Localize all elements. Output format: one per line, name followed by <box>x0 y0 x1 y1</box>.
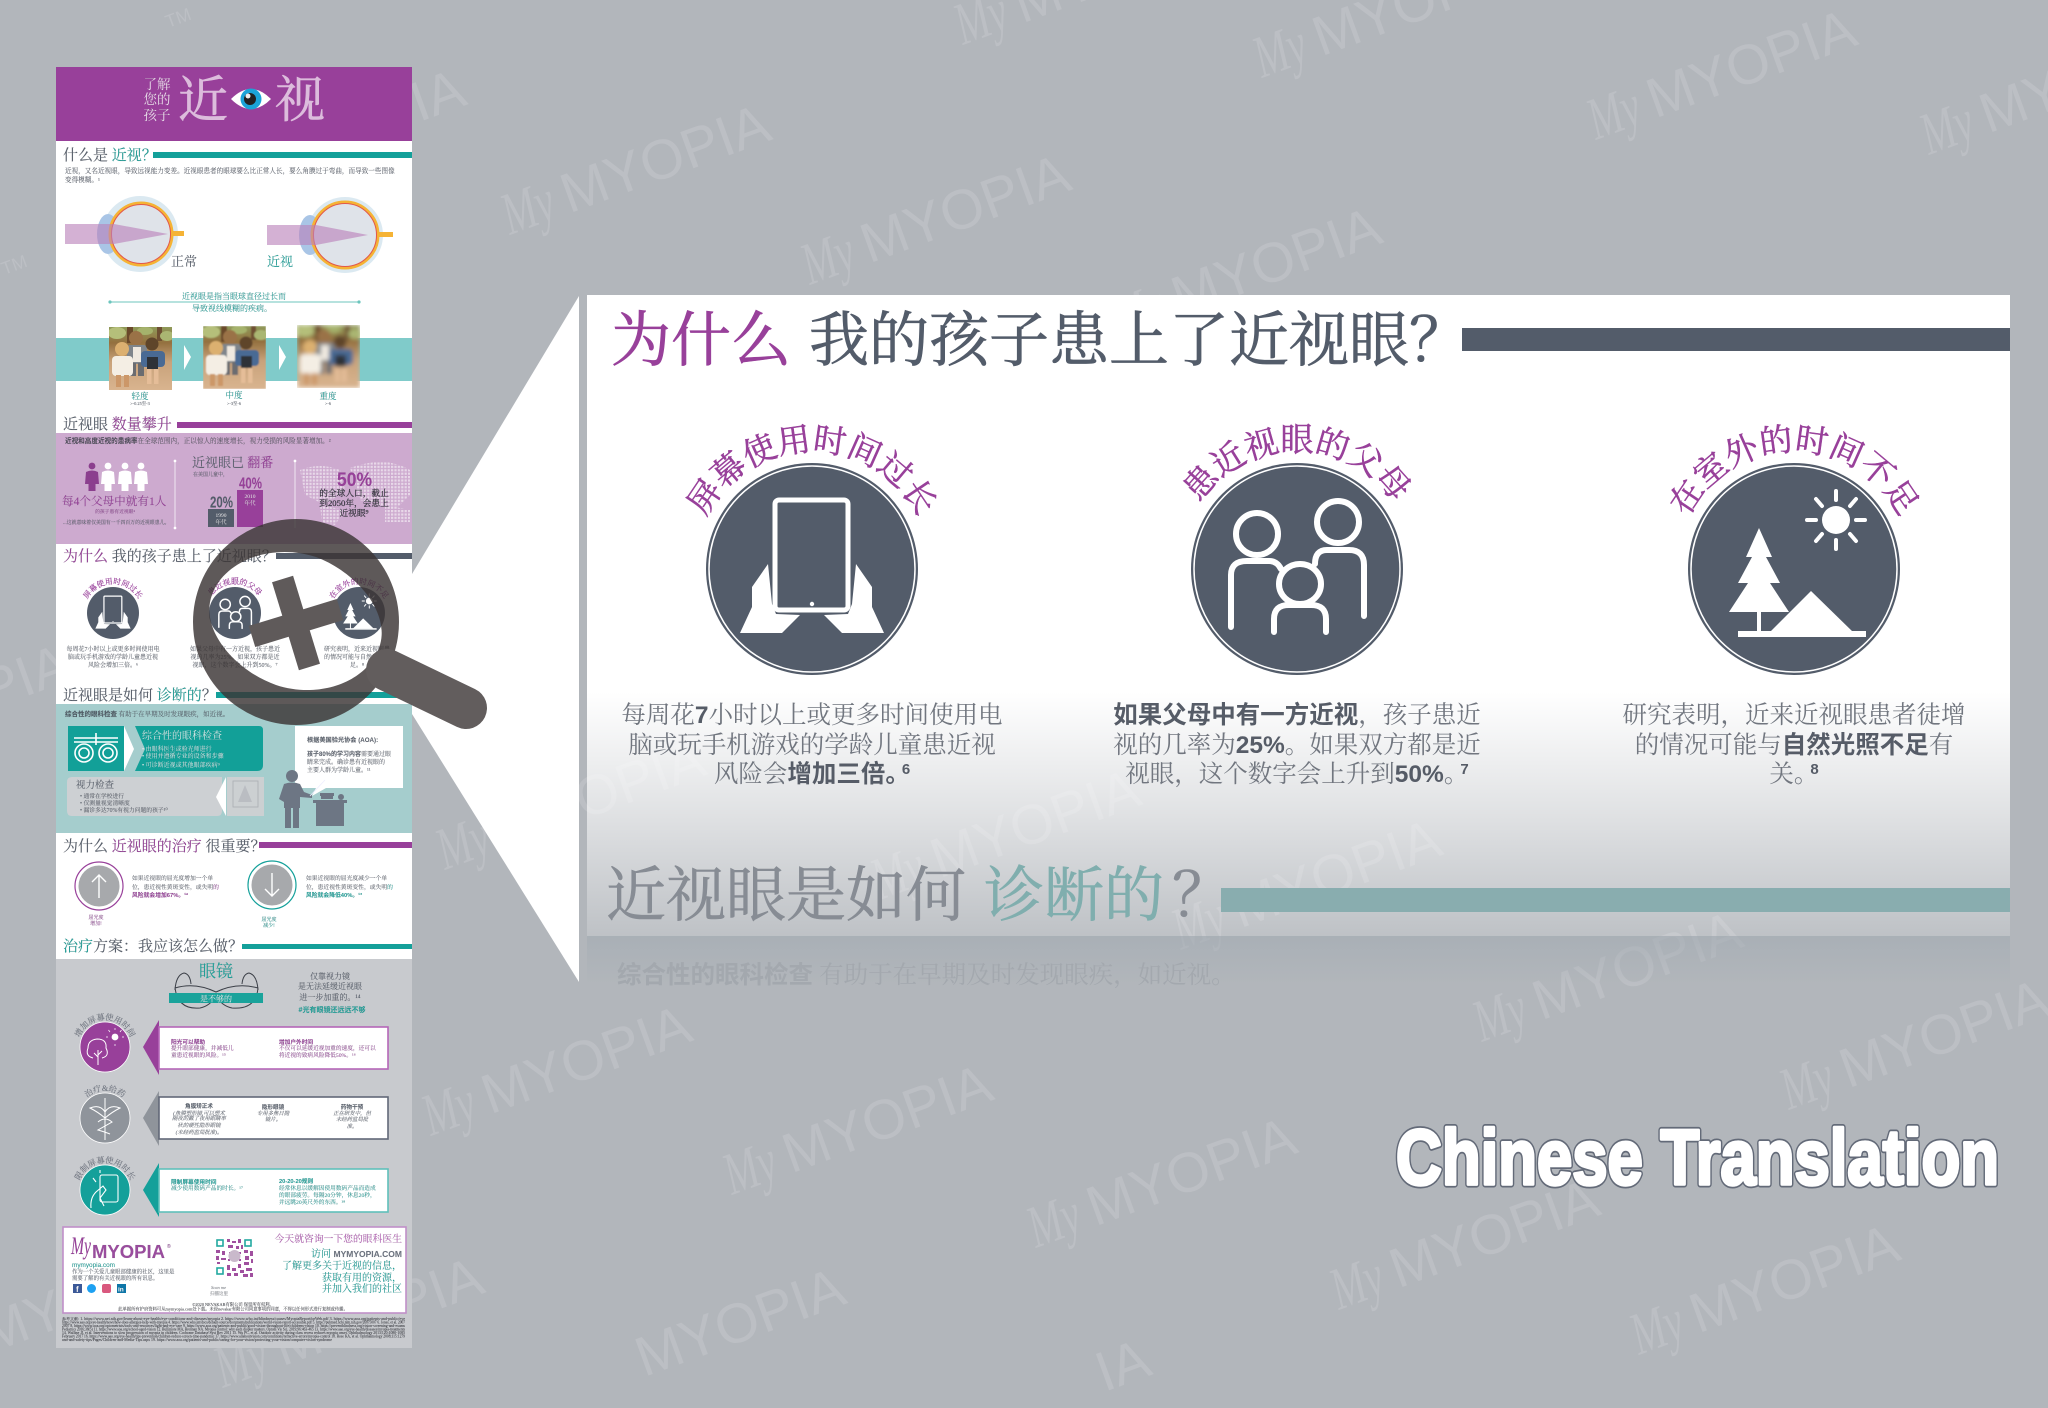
row: treatment and medication: 隐形眼镜 <box>262 1103 285 1111</box>
QR code <box>213 1235 256 1281</box>
text: risk decreases: 风险就会降低40%。¹³ <box>306 891 362 899</box>
references <box>62 1316 406 1342</box>
row: limit screen time: 限制屏幕使用时间 <box>171 1178 217 1186</box>
small cause: screen: 屏幕使用时间过长 <box>82 578 143 600</box>
cause: myopic parents: 视眼，这个数字会上升到50%。 <box>1125 761 1468 788</box>
section: why treatment matters: 为什么 近视眼的治疗 很重要？ <box>63 838 266 855</box>
severity band with photos: 重度 <box>319 391 337 401</box>
watermark pattern: My <box>1102 270 1175 350</box>
watermark pattern: MYOPIA <box>473 992 700 1126</box>
call to action <box>275 1232 402 1295</box>
box: comprehensive eye exam: • 使用并遵循专业的设备和步骤 <box>142 752 224 760</box>
row: outdoors: 将近视的致病风险降低50%。¹⁶ <box>279 1051 356 1059</box>
cause: too little outdoor time: 关。 <box>1769 761 1818 788</box>
icon: magnifying glass <box>193 519 466 725</box>
watermark pattern: My <box>791 217 864 297</box>
row: limit screen time: 经常休息以缓解因使用数码产品而造成 <box>279 1184 376 1192</box>
severity band with photos: >-3至-6 <box>227 400 242 406</box>
watermark pattern: MYOPIA <box>1638 0 1865 130</box>
small cause: parents: 患近视眼的父母 <box>208 577 262 596</box>
icon: teacher and desk <box>279 770 347 828</box>
row: limit screen time: 的眼部疲劳。每隔20分钟，休息20秒， <box>279 1191 376 1199</box>
stat: world 50 percent: 50% <box>337 469 372 491</box>
box: comprehensive eye exam: 综合性的眼科检查 <box>142 729 222 742</box>
row: outdoors: 增加屏幕使用时间 <box>74 1013 136 1037</box>
panel: full infographic <box>56 67 412 1348</box>
row: treatment and medication: (角膜塑形镜,可以塑术 <box>173 1110 225 1117</box>
row: outdoors: 童患近视眼的风险。¹⁵ <box>171 1051 226 1059</box>
stat: world 50 percent <box>300 462 410 525</box>
severity band with photos: 中度 <box>225 390 243 400</box>
severity band with photos: >-6 <box>325 401 332 406</box>
definition line <box>108 291 361 313</box>
text: glasses note <box>298 971 365 1014</box>
cause: myopic parents: 如果父母中有一方近视，孩子患近 <box>1113 700 1481 729</box>
watermark pattern: IA <box>1087 1326 1159 1403</box>
watermark pattern: MYOPIA <box>922 756 1149 890</box>
cause: myopic parents: 患近视眼的父母 <box>1182 423 1411 502</box>
stat: one in four parents: 每4个父母中就有1人 <box>62 494 167 508</box>
cause: too little outdoor time: 8 <box>1810 761 1819 778</box>
box: comprehensive eye exam: • 由眼科医生或验光师进行 <box>142 745 212 753</box>
header banner: 您的 <box>144 92 170 107</box>
heading bar <box>1462 328 2010 351</box>
references: 2007 8. https://www.aoa.org/optometrists/tools-and-resources/light-and-eye-care 9. https://www.aoa.org/patients-and-public/good-vision-throughout-life/childrens-vision 10. https://preventblindness.org/vision-screening-and-exams <box>62 1324 406 1328</box>
definition line: 近视眼是指当眼球直径过长而 <box>182 291 286 301</box>
watermark pattern: MYOPIA <box>1381 1166 1608 1300</box>
call to action: 访问 MYMYOPIA.COM <box>311 1247 402 1260</box>
section: how myopia is diagnosed: 综合性的眼科检查 有助于在早期及时发现眼疾，如近视。 <box>65 709 229 718</box>
watermark pattern: MYOPIA <box>1078 1104 1305 1238</box>
row: limit screen time: 减少使用数码产品的时长。¹⁷ <box>171 1184 243 1192</box>
row: limit screen time: 并远眺20英尺外的东西。¹⁸ <box>279 1198 345 1206</box>
cause: screen time: 屏幕使用时间过长 <box>685 424 936 518</box>
call to action: 并加入我们的社区 <box>322 1282 402 1295</box>
watermark pattern: MYOPIA <box>552 91 779 225</box>
circle: down arrow <box>248 861 296 929</box>
watermark pattern: MYOPIA <box>487 726 714 860</box>
small cause: parents: 视的几率为25%。如果双方都是近 <box>190 653 280 661</box>
references: February 2017 16. https://www.aao.org/eye-health/tips-prevention/children-reduce-screen-time-pandemic 17. https://www.allaboutvision.com/conditions/refractive-errors/myopia-control 18. Rose KA, et al. Ophthalmology 2008;115:1279 <box>62 1334 405 1340</box>
faded intro text: 综合性的眼科检查 有助于在早期及时发现眼疾，如近视。 <box>617 961 1236 989</box>
small cause: outdoors: 的情况可能与自然光照不 <box>324 653 390 661</box>
references: 参考文献: 1. https://www.nei.nih.gov/learn-about-eye-health/eye-conditions-and-diseases/myopia 2. https://www.who.int/blindness/causes/MyopiaReportforWeb.pdf 3. https://www.aoa.org/patients-and-public/eye <box>62 1316 405 1321</box>
row: treatment and medication: 药物干预 <box>341 1103 364 1111</box>
infographic background <box>56 67 412 1348</box>
cause: screen time: 风险会增加三倍。 <box>714 761 910 788</box>
box: vision screening: • 通常在学校进行 <box>80 792 124 800</box>
cause: too little outdoor time: 在室外的时间不足 <box>1670 424 1920 516</box>
heading: why my child has myopia: 为什么 我的孩子患上了近视眼？ <box>611 308 1469 374</box>
stat: doubled bar chart: 40% <box>239 476 262 492</box>
references: Pediatrics 2016;38(5) 11. https://www.aoa.org/school-aged-vision 12. Bullimore MA, Brennan NA. Myopia control: why each diopter matters. Optom Vis Sci. 2019;96:463-465 13. https://www.aao.org/eye-health/diseases/myopia-treatments <box>62 1328 406 1332</box>
stat: one in four parents <box>62 463 169 526</box>
circle: down arrow: 屈光度 <box>261 916 277 923</box>
watermark pattern: MYOPIA <box>774 1051 1001 1185</box>
circle: down arrow: 减少! <box>263 922 275 929</box>
row: limit screen time: 限制屏幕使用时长 <box>74 1156 136 1180</box>
small cause: screen: 脑或玩手机游戏的学龄儿童患近视 <box>68 653 158 661</box>
watermark pattern: My <box>491 167 564 247</box>
stat: doubled bar chart: 年代 <box>215 518 227 526</box>
diagram: normal eye: 正常 <box>171 254 197 269</box>
call to action: 获取有用的资源， <box>322 1271 402 1284</box>
cause: screen time: 6 <box>902 761 910 778</box>
row: treatment and medication: 专用多焦日抛 <box>257 1110 290 1117</box>
small cause: parents: 如果父母中有一方近视，孩子患近 <box>190 645 280 653</box>
divider dots <box>174 460 296 529</box>
section: myopia on the rise <box>56 415 412 544</box>
text: risk decreases: 位，患近视性黄斑变性，或失明的 <box>306 883 393 891</box>
small cause: outdoors: 研究表明，近来近视眼患 <box>324 645 391 653</box>
text: risk decreases: 如果近视眼的屈光度减少一个单 <box>306 874 387 882</box>
callout: AOA: 主要人群为学龄儿童。¹¹ <box>307 766 371 774</box>
watermark pattern: MYOPIA <box>1223 806 1450 940</box>
panel: magnified section <box>587 295 2010 989</box>
small cause: outdoors: 在室外的时间不足 <box>329 578 389 599</box>
watermark pattern: My <box>186 132 259 212</box>
heading: how myopia is diagnosed: 近视眼是如何 诊断的？ <box>606 863 1232 929</box>
stat: doubled bar chart <box>192 455 273 527</box>
social icons: f <box>76 1285 79 1294</box>
watermark pattern: My <box>426 802 499 882</box>
text: glasses note: #光有眼镜还远远不够 <box>299 1005 365 1014</box>
section: treatment options <box>63 938 412 1217</box>
cause: screen time: 脑或玩手机游戏的学龄儿童患近视 <box>628 731 996 759</box>
social icons <box>73 1284 126 1294</box>
box: comprehensive eye exam <box>135 726 263 771</box>
footer box: 扫描这里 <box>210 1290 228 1297</box>
watermark pattern: My <box>1577 72 1650 152</box>
watermark pattern: MYOPIA <box>247 56 474 190</box>
row: limit screen time: 20-20-20规则 <box>279 1177 313 1185</box>
watermark pattern: My <box>861 832 934 912</box>
section: what is myopia: 什么是 近视？ <box>63 147 157 164</box>
watermark pattern: My <box>204 1320 277 1400</box>
row: treatment and medication: (未经药监局批准)。 <box>176 1129 222 1136</box>
row: treatment and medication: 状的硬性隐形眼镜 <box>177 1122 222 1129</box>
row: treatment and medication: 准。 <box>347 1123 357 1130</box>
box: vision screening: 视力检查 <box>76 779 115 791</box>
footer box: 需要了解的有关近视眼的所有讯息。 <box>72 1274 158 1282</box>
section: myopia on the rise: 近视和高度近视的患病率在全球范围内，正以惊人的速度增长，视力受损的风险显著增加。² <box>65 436 331 446</box>
row: treatment and medication: 隔夜的戴了夜用眼睛率 <box>172 1115 227 1122</box>
section: how myopia is diagnosed <box>56 686 412 833</box>
logo <box>70 1233 171 1262</box>
diagram: myopic eye: 近视 <box>267 254 293 269</box>
watermark pattern: My <box>1162 882 1235 962</box>
cause: too little outdoor time: 的情况可能与自然光照不足有 <box>1635 731 1953 759</box>
stat: doubled bar chart: 在美国儿童中， <box>193 471 228 478</box>
magnified panel background <box>587 295 2010 986</box>
header banner: 近 <box>178 72 228 128</box>
box: vision screening: • 漏诊多达70%有视力问题的孩子¹⁰ <box>80 806 168 814</box>
watermark pattern: My <box>1017 1180 1090 1260</box>
box: vision screening: • 仅测量视觉清晰度 <box>80 799 130 807</box>
definition line: 导致视线模糊的疾病。 <box>192 303 272 313</box>
footer box: 作为一个关爱儿童眼部健康的社区，这里是 <box>72 1268 175 1276</box>
row: treatment and medication: 治疗&给药 <box>84 1084 126 1098</box>
icon: phoropter <box>68 726 134 771</box>
box: vision screening <box>67 777 264 816</box>
section: what is myopia: 近视，又名近视眼，导致远视能力变差。近视眼患者的眼球要么比正常人长，要么角膜过于弯曲，而导致一些图像 <box>65 166 395 176</box>
footer box: ©2020 NEVAKAR有限公司 保留所有权利。 <box>192 1301 274 1308</box>
stat: doubled bar chart: 1990 <box>216 513 227 519</box>
row: treatment and medication: 正在研发中，但 <box>333 1110 371 1117</box>
row: outdoors: 不仅可以延缓近视加重的速度，还可以 <box>279 1044 376 1052</box>
watermark pattern: My <box>1620 1287 1693 1367</box>
text: risk increases: 如果近视眼的屈光度增加一个单 <box>132 874 213 882</box>
row: treatment and medication: 角膜矫正术 <box>185 1102 213 1110</box>
cause: screen time: 每周花7小时以上或更多时间使用电 <box>621 701 1003 729</box>
stat: world 50 percent: 的全球人口，截止 <box>319 487 389 499</box>
cause: too little outdoor time: 研究表明，近来近视眼患者徒增 <box>1622 701 1966 729</box>
watermark pattern: My <box>1463 974 1536 1054</box>
cause: myopic parents: 7 <box>1460 761 1469 778</box>
section: what is myopia <box>56 147 412 406</box>
circle: up arrow <box>75 862 123 927</box>
logo: My <box>70 1233 92 1260</box>
small cause: screen <box>66 578 160 669</box>
glasses not enough: 眼镜 <box>199 961 233 981</box>
cause: screen time <box>621 424 1003 788</box>
row: outdoors <box>74 1013 389 1075</box>
header banner: 孩子 <box>144 108 170 123</box>
stat: world 50 percent: 近视眼⁹ <box>339 508 369 518</box>
row: treatment and medication <box>80 1084 389 1146</box>
stat: doubled bar chart: 近视眼已 翻番 <box>192 455 273 470</box>
severity band with photos: 轻度 <box>131 391 149 401</box>
watermark pattern: My <box>1320 1242 1393 1322</box>
small cause: screen: 每周花7小时以上或更多时间使用电 <box>66 645 160 653</box>
section: why my child has myopia <box>63 547 412 669</box>
circle: up arrow: 增加! <box>90 920 102 927</box>
watermark pattern: MYOPIA <box>627 1255 853 1388</box>
header banner: 了解 <box>144 77 171 92</box>
callout: AOA <box>295 726 403 796</box>
stat: doubled bar chart: 20% <box>210 494 233 512</box>
stat: world 50 percent: 到2050年，会患上 <box>319 497 389 509</box>
header banner <box>56 67 412 141</box>
cause: myopic parents <box>1113 423 1481 788</box>
callout: AOA: 根据美国验光协会 (AOA): <box>307 736 378 744</box>
watermark pattern: MYOPIA <box>265 1244 492 1378</box>
footer box <box>63 1227 406 1313</box>
references: 14. Walline JJ, et al. Interventions to slow progression of myopia in children. Cochrane Database Syst Rev 2011 15. Wu PC, et al. Outdoor activity during class recess reduces myopia onset. Ophthalmology 2013;120:1080-1085 <box>62 1331 405 1336</box>
call to action: 了解更多关于近视的信息， <box>282 1259 402 1272</box>
references: and-and-safety-tips/Pages/Children-and-Media-Tips.aspx 19. https://www.aoa.org/patients-and-public/caring-for-your-vision/protecting-your-vision/computer-vision-syndrome <box>62 1338 332 1342</box>
text: risk increases <box>132 874 219 899</box>
section: why my child has myopia: 为什么 我的孩子患上了近视眼？ <box>63 547 277 565</box>
text: risk increases: 风险就会增加67%。¹² <box>132 891 188 899</box>
footer box: mymyopia.com <box>72 1262 115 1269</box>
box: comprehensive eye exam: • 可诊断近视或其他眼部疾病⁹ <box>142 761 220 769</box>
severity band with photos <box>56 325 412 406</box>
icon: eye <box>231 88 271 110</box>
watermark pattern: My <box>1770 1042 1843 1122</box>
stat: doubled bar chart: 2010 <box>244 494 256 500</box>
row: outdoors: 增加户外时间 <box>279 1038 313 1046</box>
callout: AOA: 睛来完成。确诊患有近视眼的 <box>307 758 385 766</box>
watermark pattern: MYOPIA <box>1524 898 1751 1032</box>
row: treatment and medication: 镜片。 <box>265 1116 281 1123</box>
severity band with photos: >-0.25至-3 <box>130 400 151 406</box>
section: myopia on the rise: 近视眼 数量攀升 <box>63 415 172 433</box>
small cause: outdoors <box>324 578 391 669</box>
glasses not enough: 是不够的 <box>200 994 232 1004</box>
text: glasses note: 进一步加重的。¹⁴ <box>299 992 361 1002</box>
row: outdoors: 提升眼部健康，并减低儿 <box>171 1044 234 1052</box>
watermark pattern: MYOPIA <box>1681 1211 1908 1345</box>
section: how myopia is diagnosed: 近视眼是如何 诊断的？ <box>63 686 217 704</box>
small cause: outdoors: 足。⁸ <box>350 661 364 669</box>
watermark pattern: My <box>713 1127 786 1207</box>
diagram: normal eye <box>65 196 197 272</box>
watermark pattern: My <box>412 1068 485 1148</box>
section: why treatment matters <box>63 838 412 929</box>
call to action: 今天就咨询一下您的眼科医生 <box>275 1232 402 1245</box>
stat: one in four parents: 的孩子患有近视眼³ <box>95 508 135 515</box>
callout: AOA: 孩子80%的学习内容需要通过眼 <box>307 750 391 758</box>
watermark pattern: My <box>1243 10 1316 90</box>
watermark pattern: MYOPIA <box>1163 194 1390 328</box>
circle: up arrow: 屈光度 <box>88 914 104 921</box>
logo: ® <box>167 1243 171 1250</box>
references: https://www.aao.org/eye-health/news/how-does-allergies-help-with-myopia 4. https://www.who.int/docs/default-source/documents/publications/world-vision-report-accessible.pdf 5. https://pubmed.ncbi.nlm.nih.gov/26875007 6. Jones, et al. 2007 <box>62 1320 405 1326</box>
footer box: Scan me <box>211 1285 226 1290</box>
text: risk decreases <box>306 874 393 899</box>
row: treatment and medication: 未经药监局批 <box>336 1116 369 1123</box>
glasses not enough <box>169 961 263 1008</box>
heading bar teal <box>1221 888 2010 912</box>
row: outdoors: 阳光可以帮助 <box>171 1038 205 1046</box>
stat: one in four parents: ...这就意味着仅美国有一千四百万的近视眼患儿。 <box>63 519 169 526</box>
cause: too little outdoor time <box>1622 424 1966 788</box>
footer box: 此单据所有护府资料可从mymyopia.com处下载。未经nevakar有限公司同意事项的同意，不得以任何形式进行复制或传播。 <box>118 1306 348 1312</box>
stat: doubled bar chart: 年代 <box>244 499 256 507</box>
small cause: screen: 风险会增加三倍。⁶ <box>88 661 138 669</box>
watermark pattern: My <box>1910 87 1983 167</box>
text: glasses note: 仅靠视力镜 <box>310 971 350 981</box>
text: glasses note: 是无法延缓近视眼 <box>298 981 362 991</box>
section: treatment options: 治疗方案：我应该怎么做？ <box>63 938 243 955</box>
small cause: parents <box>190 577 280 669</box>
row: limit screen time <box>74 1156 389 1217</box>
section: what is myopia: 变得模糊。¹ <box>65 175 100 184</box>
logo: MYOPIA <box>92 1241 165 1262</box>
watermark pattern: MYOPIA <box>852 141 1079 275</box>
watermark pattern: TM <box>163 4 194 32</box>
zoom callout wedge <box>412 296 579 982</box>
social icons: in <box>118 1286 124 1294</box>
small cause: parents: 视眼，这个数字会上升到50%。⁷ <box>192 661 278 669</box>
cause: myopic parents: 视的几率为25%。如果双方都是近 <box>1113 731 1481 759</box>
text: risk increases: 位，患近视性黄斑变性，或失明的 <box>132 883 219 891</box>
header banner: 视 <box>275 72 325 128</box>
diagram: myopic eye <box>267 197 393 273</box>
